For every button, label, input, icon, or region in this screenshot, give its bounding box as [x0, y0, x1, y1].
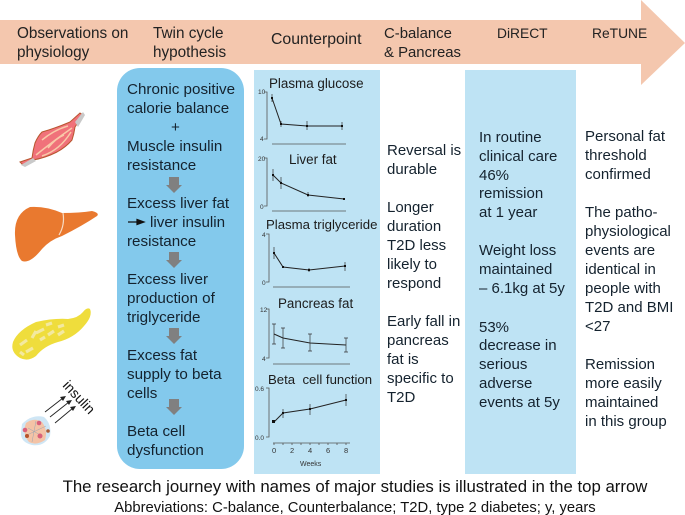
text: excess fat supply to beta cells: cells: [127, 385, 158, 402]
axis labels: 8: [344, 446, 348, 455]
text block: ReTUNE findings: The patho-: [585, 204, 658, 221]
text block: C-balance and pancreas findings: fat is: [387, 351, 419, 368]
chart: plasma triglyceride: Plasma triglyceride: [266, 217, 377, 232]
text block: C-balance and pancreas findings: respond: [387, 275, 441, 292]
top arrow: research journey: [0, 0, 685, 85]
text block: C-balance and pancreas findings: T2D: [387, 389, 416, 406]
text: chronic positive calorie balance: +: [171, 119, 180, 136]
chart: pancreas fat: 4: [262, 356, 266, 363]
icon: pancreas: [12, 308, 91, 360]
chart: liver fat: 0: [260, 204, 264, 211]
icon: liver: [15, 207, 98, 262]
chart: liver fat: [258, 152, 346, 211]
chart: plasma glucose: 4: [260, 136, 264, 143]
panel: DiRECT findings: 53%: [479, 319, 509, 336]
heading: C-balance and Pancreas: C-balance: [384, 26, 452, 42]
panel: DiRECT findings: In routine: [479, 129, 542, 146]
panel: counterpoint charts: [254, 70, 380, 474]
axis labels: 6: [326, 446, 330, 455]
text block: C-balance and pancreas findings: Early fall in: [387, 313, 460, 330]
text block: ReTUNE findings: threshold: [585, 147, 647, 164]
caption: The research journey with names of major studies is illustrated in the top arrow: [63, 477, 648, 496]
heading: Observations on physiology: physiology: [17, 44, 90, 61]
panel: DiRECT findings: – 6.1kg at 5y: [479, 280, 565, 297]
chart: pancreas fat: Pancreas fat: [278, 296, 353, 311]
arrow: down: [166, 252, 182, 268]
panel: DiRECT findings: remission: [479, 185, 543, 202]
panel: DiRECT findings: maintained: [479, 261, 552, 278]
text block: ReTUNE findings: more easily: [585, 375, 662, 392]
text block: ReTUNE findings: Remission: [585, 356, 655, 373]
text: excess fat supply to beta cells: supply to beta: [127, 366, 222, 383]
chart: pancreas fat: 12: [260, 307, 268, 314]
heading: Observations on physiology: Observations on: [17, 25, 128, 42]
text: excess liver fat: liver insulin: [150, 214, 225, 231]
text: beta cell dysfunction: dysfunction: [127, 442, 204, 459]
text block: C-balance and pancreas findings: durable: [387, 161, 437, 178]
text: excess liver production of triglyceride: Excess liver: [127, 271, 208, 288]
arrow: down: [166, 177, 182, 193]
chart: pancreas fat: [260, 296, 353, 364]
icon: muscle: [20, 112, 85, 167]
chart: beta cell function: [255, 372, 372, 468]
panel: DiRECT findings: adverse: [479, 375, 532, 392]
panel: DiRECT findings: serious: [479, 356, 527, 373]
heading: Twin cycle hypothesis: hypothesis: [153, 44, 226, 61]
text block: ReTUNE findings: confirmed: [585, 166, 651, 183]
chart: liver fat: 20: [258, 156, 266, 163]
text: beta cell dysfunction: Beta cell: [127, 423, 185, 440]
chart: beta cell function: 0.0: [255, 435, 264, 442]
text: chronic positive calorie balance: calorie balance: [127, 100, 229, 117]
text block: ReTUNE findings: <27: [585, 318, 610, 335]
panel: DiRECT findings: at 1 year: [479, 204, 537, 221]
arrow: leads to: [128, 220, 144, 224]
chart: plasma triglyceride: 0: [262, 280, 266, 287]
panel: DiRECT findings: Weight loss: [479, 242, 556, 259]
text block: C-balance and pancreas findings: likely to: [387, 256, 437, 273]
text block: ReTUNE findings: events are: [585, 242, 655, 259]
text: excess liver production of triglyceride: triglyceride: [127, 309, 200, 326]
text block: C-balance and pancreas findings: duration: [387, 218, 441, 235]
text block: C-balance and pancreas findings: pancreas: [387, 332, 449, 349]
text: excess liver fat: resistance: [127, 233, 196, 250]
panel: DiRECT findings: [465, 70, 576, 474]
chart: liver fat: Liver fat: [289, 152, 337, 167]
text block: C-balance and pancreas findings: T2D less: [387, 237, 446, 254]
text: chronic positive calorie balance: Chronic positive: [127, 81, 235, 98]
heading: ReTUNE: ReTUNE: [592, 26, 647, 41]
arrow: down: [166, 328, 182, 344]
text block: ReTUNE findings: Personal fat: [585, 128, 665, 145]
text block: ReTUNE findings: maintained: [585, 394, 658, 411]
heading: DiRECT: DiRECT: [497, 26, 548, 41]
axis labels: 2: [290, 446, 294, 455]
chart: beta cell function: Beta cell function: [268, 372, 372, 387]
axis labels: 0: [272, 446, 276, 455]
text: excess fat supply to beta cells: Excess fat: [127, 347, 197, 364]
chart: beta cell function: 0.6: [255, 386, 264, 393]
panel: DiRECT findings: events at 5y: [479, 394, 560, 411]
label: insulin: insulin: [60, 377, 99, 417]
text block: ReTUNE findings: physiological: [585, 223, 671, 240]
heading: Counterpoint: Counterpoint: [271, 31, 362, 48]
chart: plasma triglyceride: 4: [262, 232, 266, 239]
icon: beta cell with insulin arrows: [21, 377, 99, 445]
text block: C-balance and pancreas findings: specific to: [387, 370, 454, 387]
text block: ReTUNE findings: T2D and BMI: [585, 299, 673, 316]
chart: plasma glucose: [258, 76, 364, 144]
text: excess liver production of triglyceride: production of: [127, 290, 216, 307]
axis labels: 4: [308, 446, 312, 455]
panel: DiRECT findings: decrease in: [479, 337, 557, 354]
arrow: down: [166, 399, 182, 415]
heading: C-balance and Pancreas: & Pancreas: [384, 45, 461, 61]
axis title: weeks: Weeks: [300, 461, 322, 468]
chart: plasma glucose: Plasma glucose: [269, 76, 364, 91]
text: chronic positive calorie balance: resistance: [127, 157, 196, 174]
chart: plasma triglyceride: [262, 217, 377, 287]
text block: ReTUNE findings: identical in: [585, 261, 656, 278]
text: excess liver fat: Excess liver fat: [127, 195, 229, 212]
text block: ReTUNE findings: in this group: [585, 413, 667, 430]
panel: DiRECT findings: 46%: [479, 167, 509, 184]
text block: ReTUNE findings: people with: [585, 280, 661, 297]
text block: C-balance and pancreas findings: Reversal is: [387, 142, 461, 159]
heading: Twin cycle hypothesis: Twin cycle: [153, 25, 224, 42]
panel: twin cycle hypothesis: [117, 68, 244, 469]
text block: C-balance and pancreas findings: Longer: [387, 199, 434, 216]
text: chronic positive calorie balance: Muscle insulin: [127, 138, 222, 155]
chart: plasma glucose: 10: [258, 89, 266, 96]
panel: DiRECT findings: clinical care: [479, 148, 557, 165]
